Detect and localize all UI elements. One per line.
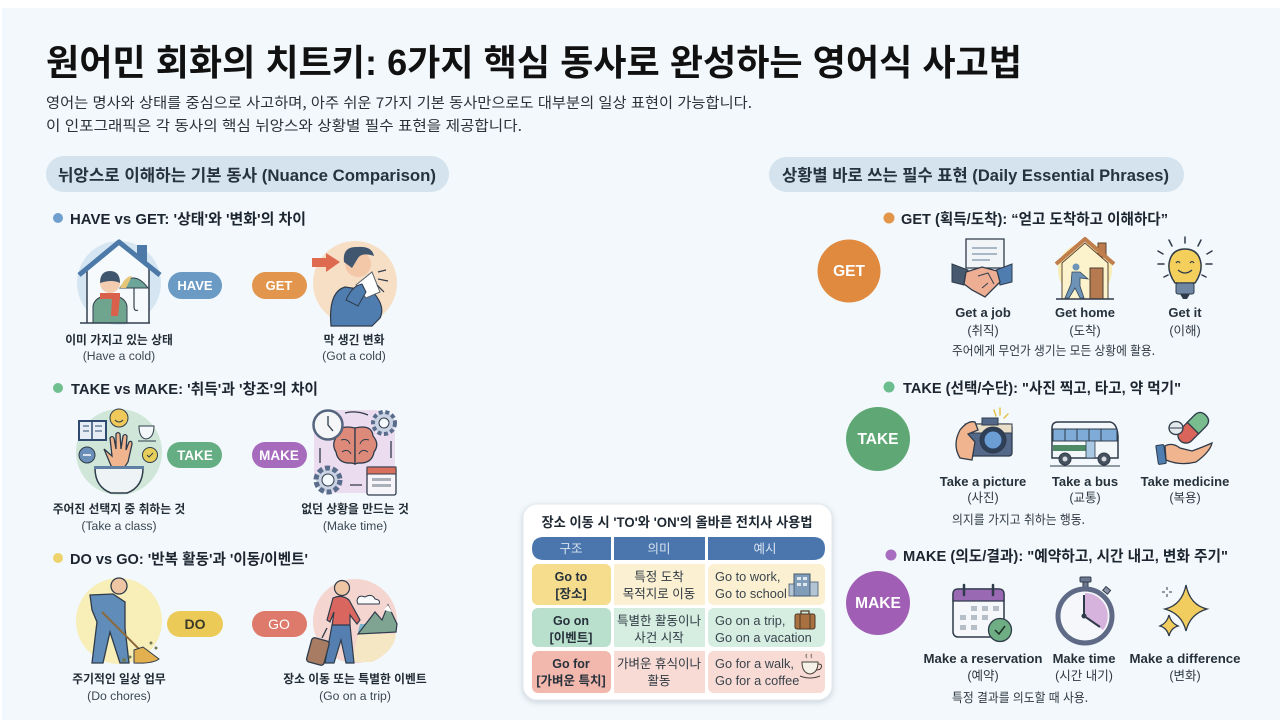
icon: person sweeping: [76, 578, 162, 664]
caption: get home: [1055, 305, 1115, 338]
caption: got a cold: 막 생긴 변화: [324, 331, 385, 348]
section heading: nuance comparison: 뉘앙스로 이해하는 기본 동사 (Nuance Comparison): [58, 166, 436, 185]
caption: got a cold: (Got a cold): [322, 349, 386, 363]
caption: get it: [1168, 305, 1202, 338]
row: go on: [이벤트]: [550, 631, 592, 645]
row: go on: Go on a trip,: [715, 613, 785, 628]
icon: medicine over hand: [1156, 410, 1212, 464]
badge: take: [846, 407, 910, 471]
caption: make time: [301, 500, 409, 533]
pill: take: TAKE: [177, 448, 213, 463]
caption: make time: [1053, 651, 1115, 683]
row: go for: 활동: [647, 674, 671, 688]
pill: get: GET: [266, 278, 292, 293]
row: go on: 사건 시작: [634, 631, 684, 645]
caption: make time: (Make time): [323, 519, 387, 533]
icon: camera in hand: [956, 408, 1012, 460]
caption: have a cold: 이미 가지고 있는 상태: [65, 331, 173, 348]
section heading: nuance comparison: [46, 156, 449, 192]
icon: bus: [1050, 422, 1120, 466]
icon: coffee cup: [800, 654, 822, 678]
row: go to: Go to work,: [715, 569, 780, 584]
pill: go: [252, 611, 307, 637]
heading: take vs make: TAKE vs MAKE: '취득'과 '창조'의 차이: [71, 381, 318, 398]
caption: go on a trip: (Go on a trip): [319, 689, 391, 703]
caption: get it: (이해): [1169, 324, 1201, 338]
section heading: daily essential phrases: 상황별 바로 쓰는 필수 표현 (Daily Essential Phrases): [782, 166, 1169, 185]
icon: hand taking from a bowl: [76, 409, 162, 495]
row: go on: 특별한 활동이나: [617, 614, 701, 628]
table header: 예시: [753, 542, 777, 556]
pill: make: [252, 442, 307, 468]
caption: make a reservation: [924, 651, 1043, 683]
badge: get: [818, 240, 880, 302]
caption: take medicine: (복용): [1169, 491, 1201, 505]
row: go to: Go to school: [715, 586, 787, 601]
caption: make time: Make time: [1053, 651, 1115, 666]
row: go to: 목적지로 이동: [623, 587, 695, 601]
caption: get home: Get home: [1055, 305, 1115, 320]
heading: take: TAKE (선택/수단): "사진 찍고, 타고, 약 먹기": [903, 380, 1181, 397]
title: 원어민 회화의 치트키: 6가지 핵심 동사로 완성하는 영어식 사고법: [46, 42, 1022, 83]
icon: sneezing person: [312, 241, 397, 326]
row: go for: 가벼운 휴식이나: [617, 657, 701, 671]
panel: take phrases: [846, 380, 1229, 528]
icon: handshake and contract: [952, 239, 1012, 297]
caption: make time: 없던 상황을 만드는 것: [301, 500, 409, 517]
table title: 장소 이동 시 'TO'와 'ON'의 올바른 전치사 사용법: [542, 515, 812, 530]
pill: take: [167, 442, 222, 468]
row: go to: [장소]: [555, 587, 587, 601]
icon: brain with clock, gears and calendar: [314, 410, 396, 495]
row: go to: [532, 564, 825, 605]
pill: make: MAKE: [259, 448, 299, 463]
intro text: [46, 92, 752, 136]
pill: do: [167, 611, 223, 637]
heading: have vs get: HAVE vs GET: '상태'와 '변화'의 차이: [70, 211, 306, 228]
caption: get it: Get it: [1168, 305, 1202, 320]
caption: go on a trip: [283, 670, 427, 703]
badge: make: MAKE: [855, 595, 901, 612]
row: go to: Go to: [555, 570, 588, 584]
caption: make a difference: (변화): [1169, 669, 1201, 683]
caption: get home: (도착): [1069, 324, 1101, 338]
heading: get: GET (획득/도착): “얻고 도착하고 이해하다”: [901, 211, 1168, 228]
pill: do: DO: [184, 616, 206, 632]
caption: take medicine: [1141, 474, 1229, 505]
caption: do chores: (Do chores): [87, 689, 151, 703]
pill: have: HAVE: [177, 278, 213, 293]
row: go for: Go for: [552, 657, 590, 671]
table header: [532, 537, 825, 560]
caption: make a reservation: Make a reservation: [924, 651, 1043, 666]
panel: have vs get: [53, 211, 397, 363]
note: get: 주어에게 무언가 생기는 모든 상황에 활용.: [952, 340, 1155, 359]
caption: make time: (시간 내기): [1055, 669, 1113, 683]
heading: make: MAKE (의도/결과): "예약하고, 시간 내고, 변화 주기": [903, 548, 1228, 565]
caption: get a job: (취직): [967, 324, 999, 338]
caption: take a bus: [1052, 474, 1118, 505]
caption: have a cold: [65, 331, 173, 363]
table header: 구조: [559, 542, 583, 556]
caption: do chores: 주기적인 일상 업무: [72, 670, 166, 687]
icon: stopwatch: [1058, 577, 1112, 643]
caption: take a bus: Take a bus: [1052, 474, 1118, 489]
row: go to: 특정 도착: [634, 570, 684, 584]
pill: go: GO: [268, 616, 290, 632]
caption: make a difference: Make a difference: [1130, 651, 1240, 666]
section heading: daily essential phrases: [769, 157, 1184, 192]
row: go for: Go for a coffee: [715, 673, 799, 688]
caption: go on a trip: 장소 이동 또는 특별한 이벤트: [283, 670, 427, 687]
note: make: 특정 결과를 의도할 때 사용.: [952, 687, 1088, 706]
row: go for: Go for a walk,: [715, 656, 794, 671]
icon: person walking home: [1056, 239, 1114, 299]
caption: take medicine: Take medicine: [1141, 474, 1229, 489]
table header: 의미: [647, 542, 671, 556]
panel: do vs go: [53, 551, 427, 703]
panel: get phrases: [818, 211, 1212, 359]
panel: take vs make: [53, 381, 409, 533]
icon: suitcase: [795, 611, 815, 629]
caption: get a job: Get a job: [955, 305, 1011, 320]
icon: person with a cold in a house: [77, 241, 161, 325]
note: take: 의지를 가지고 취하는 행동.: [952, 509, 1085, 528]
icon: traveller with suitcase: [306, 579, 397, 666]
panel: make phrases: [846, 548, 1240, 706]
row: go for: [532, 651, 825, 693]
icon: smiling light bulb: [1158, 237, 1212, 299]
intro text: 이 인포그래픽은 각 동사의 핵심 뉘앙스와 상황별 필수 표현을 제공합니다.: [46, 115, 522, 136]
caption: make a difference: [1130, 651, 1240, 683]
caption: do chores: [72, 670, 166, 703]
row: go on: Go on a vacation: [715, 630, 812, 645]
caption: take a picture: Take a picture: [940, 474, 1026, 489]
pill: get: [252, 272, 307, 299]
caption: got a cold: [322, 331, 386, 363]
caption: take a bus: (교통): [1069, 491, 1101, 505]
caption: take a class: [53, 500, 185, 533]
badge: get: GET: [833, 263, 865, 280]
caption: have a cold: (Have a cold): [83, 349, 155, 363]
caption: take a picture: [940, 474, 1026, 505]
row: go on: Go on: [553, 614, 589, 628]
icon: building: [789, 574, 818, 596]
icon: sparkles: [1160, 585, 1207, 636]
badge: make: [846, 571, 910, 635]
heading: do vs go: DO vs GO: '반복 활동'과 '이동/이벤트': [70, 551, 308, 568]
caption: take a class: 주어진 선택지 중 취하는 것: [53, 500, 185, 517]
intro text: 영어는 명사와 상태를 중심으로 사고하며, 아주 쉬운 7가지 기본 동사만으로도 대부분의 일상 표현이 가능합니다.: [46, 92, 752, 113]
caption: make a reservation: (예약): [967, 668, 999, 683]
caption: take a picture: (사진): [967, 491, 999, 505]
caption: get a job: [955, 305, 1011, 338]
icon: calendar with check: [953, 585, 1012, 642]
badge: take: TAKE: [857, 431, 899, 448]
panel: preposition table: [523, 504, 832, 700]
pill: have: [168, 272, 222, 299]
row: go for: [가벼운 특치]: [536, 673, 606, 688]
row: go on: [532, 608, 825, 647]
caption: take a class: (Take a class): [81, 519, 157, 533]
